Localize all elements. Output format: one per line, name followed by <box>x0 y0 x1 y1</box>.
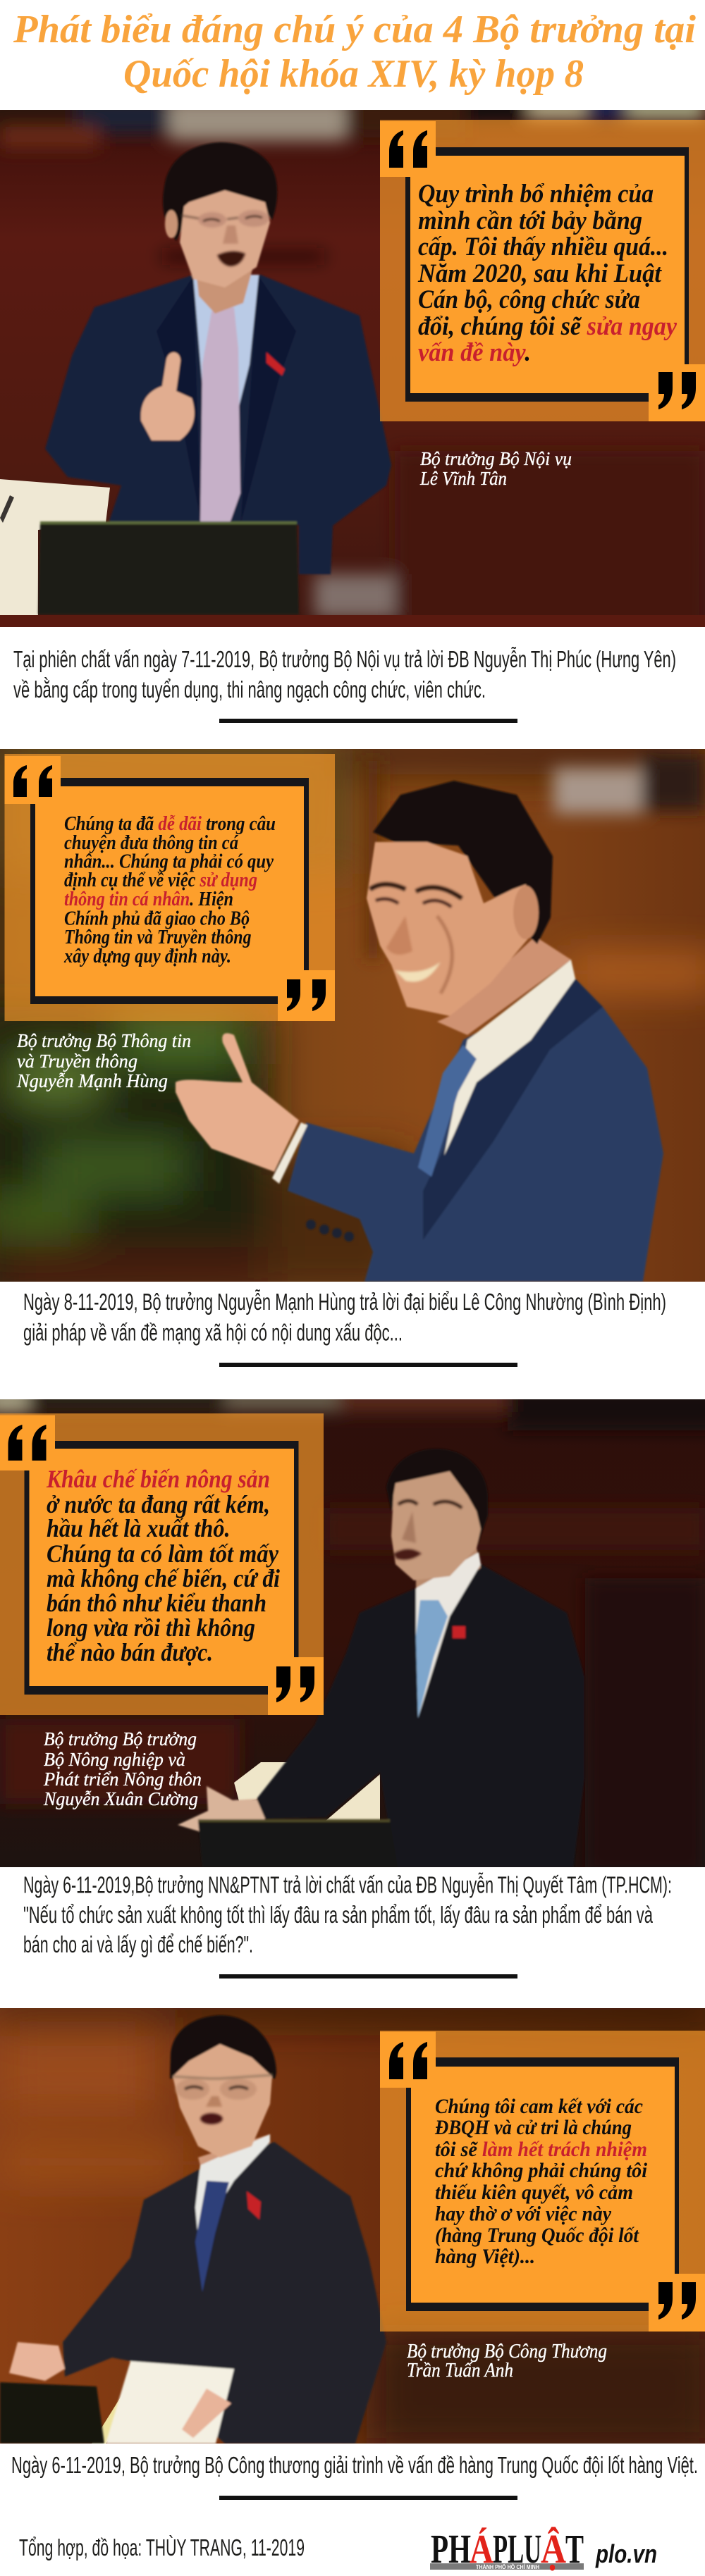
logo tagline: THÀNH PHỐ HỒ CHÍ MINH <box>476 2563 539 2570</box>
quote text: thể nào bán được. <box>47 1638 213 1666</box>
podium <box>38 523 299 614</box>
quote text: Khâu chế biến nông sản <box>46 1465 270 1493</box>
photo: Trần Tuấn Anh speaking at podium <box>0 1994 705 2452</box>
chair <box>234 1762 380 1821</box>
quote text: xây dựng quy định này. <box>63 946 231 967</box>
chair <box>0 479 110 615</box>
icon: closing quote mark <box>278 970 335 1021</box>
shirt collar <box>444 960 575 1156</box>
quote text: định cụ thể về việc sử dụng <box>64 869 257 891</box>
shirt <box>416 1552 481 1718</box>
text block: context 2 <box>23 1289 666 1346</box>
quote box <box>380 2031 705 2332</box>
caption: và Truyền thông <box>17 1051 137 1072</box>
box: translucent backing <box>4 754 335 1021</box>
quote text: ĐBQH và cử tri là chúng <box>434 2116 632 2139</box>
suit buttons <box>306 1220 354 1241</box>
box: black frame and orange body <box>24 1441 299 1695</box>
site name: plo.vn <box>595 2539 657 2568</box>
quote text: Cán bộ, công chức sửa <box>418 285 640 314</box>
title: Phát biểu đáng chú ý của 4 Bộ trưởng tại <box>13 8 696 51</box>
neck <box>416 1548 481 1596</box>
tie <box>416 1600 448 1718</box>
quote text: đổi, chúng tôi sẽ sửa ngay <box>418 312 678 341</box>
caption <box>407 2341 607 2382</box>
caption: Bộ trưởng Bộ trưởng <box>44 1728 197 1750</box>
quote text: nhân... Chúng ta phải có quy <box>64 851 274 872</box>
suit <box>45 275 391 574</box>
quote text: bán thô như kiểu thanh <box>47 1589 266 1617</box>
caption: Bộ trưởng Bộ Nội vụ <box>420 448 572 469</box>
logo bar <box>430 2563 584 2570</box>
hair <box>170 2015 276 2079</box>
caption: Trần Tuấn Anh <box>407 2360 513 2382</box>
face <box>367 842 530 1016</box>
quote text: Chính phủ đã giao cho Bộ <box>64 908 250 930</box>
tie <box>195 2181 229 2292</box>
icon: opening quote mark <box>0 1415 55 1470</box>
icon: closing quote mark <box>649 364 705 421</box>
second hand <box>182 2389 231 2438</box>
text block: context 1: về bằng cấp trong tuyển dụng, thi nâng ngạch công chức, viên chức. <box>13 676 486 702</box>
quote text: hàng Việt)... <box>435 2245 535 2268</box>
podium <box>0 2382 104 2444</box>
photo: Nguyễn Xuân Cường speaking at podium <box>0 1388 705 1874</box>
hair <box>386 1449 488 1548</box>
quote text: thông tin cá nhân. Hiện <box>64 888 233 910</box>
panel: minister Lê Vĩnh Tân <box>0 99 705 634</box>
photo: Lê Vĩnh Tân speaking at podium <box>0 99 705 634</box>
photo: Nguyễn Mạnh Hùng smiling and gesturing <box>0 733 705 1304</box>
panel: minister Trần Tuấn Anh <box>0 1994 705 2452</box>
face <box>391 1471 481 1580</box>
quote text <box>417 180 678 367</box>
quote text: Thông tin và Truyền thông <box>64 927 251 948</box>
caption <box>419 448 572 489</box>
quote box <box>0 1413 324 1715</box>
suit <box>257 1564 584 1867</box>
suit shadow folds <box>423 979 603 1240</box>
quote text: Quy trình bổ nhiệm của <box>418 180 654 209</box>
box: black frame and orange body <box>405 147 689 402</box>
pin <box>247 2191 261 2219</box>
box: black frame and orange body <box>406 2057 679 2311</box>
quote text: long vừa rồi thì không <box>47 1614 255 1642</box>
icon: closing quote mark <box>649 2274 705 2332</box>
tie <box>418 1045 477 1177</box>
icon: opening quote mark <box>380 2032 436 2088</box>
hand <box>178 1786 265 1832</box>
quote text: hay thờ ơ với việc này <box>435 2203 612 2225</box>
quote text <box>63 813 276 967</box>
quote text: hầu hết là xuất thô. <box>47 1514 230 1542</box>
hand with pen <box>9 2342 65 2381</box>
shirt <box>193 275 259 409</box>
quote text: thiếu kiên quyết, vô cảm <box>435 2181 633 2204</box>
icon: closing quote mark <box>268 1657 324 1715</box>
podium <box>198 1821 398 1867</box>
microphone <box>0 495 14 523</box>
quote text: vấn đề này. <box>418 338 531 367</box>
box: translucent backing <box>380 2031 705 2332</box>
neck <box>437 936 571 1035</box>
paper <box>106 2361 234 2444</box>
quote text: (hàng Trung Quốc đội lốt <box>435 2224 640 2247</box>
neck <box>196 264 254 314</box>
facial details <box>370 884 462 993</box>
quote box <box>380 120 705 421</box>
quote text <box>46 1465 280 1666</box>
text block: context 2: giải pháp về vấn đề mạng xã hội có nội dung xấu độc... <box>23 1319 403 1346</box>
caption: Bộ Nông nghiệp và <box>44 1749 185 1770</box>
face <box>173 2044 272 2157</box>
quote text: Chúng tôi cam kết với các <box>435 2095 643 2118</box>
panel: minister Nguyễn Xuân Cường <box>0 1388 705 1874</box>
hair <box>163 142 277 241</box>
icon: opening quote mark <box>4 756 61 804</box>
text block: context 3: bán cho ai và lấy gì để chế biến?". <box>23 1931 253 1957</box>
neck <box>198 2134 270 2181</box>
shirt cuff <box>272 1122 307 1184</box>
caption: Phát triển Nông thôn <box>43 1769 202 1790</box>
facial details <box>173 2075 272 2124</box>
pin <box>453 1626 465 1638</box>
quote text: Chúng ta có làm tốt mấy <box>47 1540 279 1568</box>
credit line: Tổng hợp, đồ họa: THÙY TRANG, 11-2019 <box>19 2534 305 2560</box>
panel: minister Nguyễn Mạnh Hùng <box>0 733 705 1304</box>
suit <box>63 2142 386 2444</box>
tie <box>200 307 240 525</box>
text block: context 1 <box>13 646 676 702</box>
hair <box>373 781 553 944</box>
text block: context 3 <box>23 1871 672 1957</box>
quote text: mà không chế biến, cứ đi <box>47 1564 280 1592</box>
box: translucent backing <box>0 1413 324 1715</box>
logo: Pháp Luật plo.vn <box>430 2526 657 2572</box>
caption: Bộ trưởng Bộ Thông tin <box>17 1030 191 1051</box>
quote text: cấp. Tôi thấy nhiều quá... <box>418 233 668 261</box>
quote text: mình cần tới bảy bằng <box>418 206 642 235</box>
caption: Nguyễn Xuân Cường <box>43 1788 198 1809</box>
logo wordmark: PH <box>431 2526 471 2572</box>
facial details <box>393 1501 462 1560</box>
caption <box>16 1030 191 1091</box>
ear <box>165 210 178 238</box>
quote text: Chúng ta đã dễ dãi trong câu <box>64 813 276 835</box>
box: black frame and orange body <box>30 778 309 1004</box>
lapels <box>157 276 296 525</box>
title <box>13 8 696 96</box>
quote text: Năm 2020, sau khi Luật <box>417 259 663 288</box>
quote text <box>434 2095 648 2268</box>
caption <box>43 1728 202 1809</box>
shirt <box>195 2134 270 2238</box>
quote text: chuyện đưa thông tin cá <box>64 832 239 854</box>
logo wordmark: Ậ <box>541 2526 566 2572</box>
caption: Nguyễn Mạnh Hùng <box>16 1070 168 1091</box>
caption: Lê Vĩnh Tân <box>419 468 507 489</box>
suit <box>288 979 663 1282</box>
logo wordmark: Á <box>470 2526 494 2572</box>
logo wordmark: PLU <box>493 2526 541 2572</box>
title: Quốc hội khóa XIV, kỳ họp 8 <box>123 52 584 96</box>
ear <box>513 886 539 939</box>
quote text: tôi sẽ làm hết trách nhiệm <box>435 2138 647 2161</box>
box: translucent backing <box>380 120 705 421</box>
facial details <box>182 210 269 266</box>
thumb-up hand <box>141 352 195 440</box>
chair <box>92 2339 164 2444</box>
pin <box>266 352 285 376</box>
logo wordmark: T <box>565 2526 584 2572</box>
quote text: ở nước ta đang rất kém, <box>47 1490 270 1518</box>
icon: opening quote mark <box>380 121 436 177</box>
caption: Bộ trưởng Bộ Công Thương <box>407 2341 607 2363</box>
quote box <box>4 754 335 1021</box>
quote text: chứ không phải chúng tôi <box>435 2159 648 2182</box>
hand <box>176 1033 299 1172</box>
face <box>180 190 270 287</box>
logo wordmark <box>431 2526 584 2572</box>
